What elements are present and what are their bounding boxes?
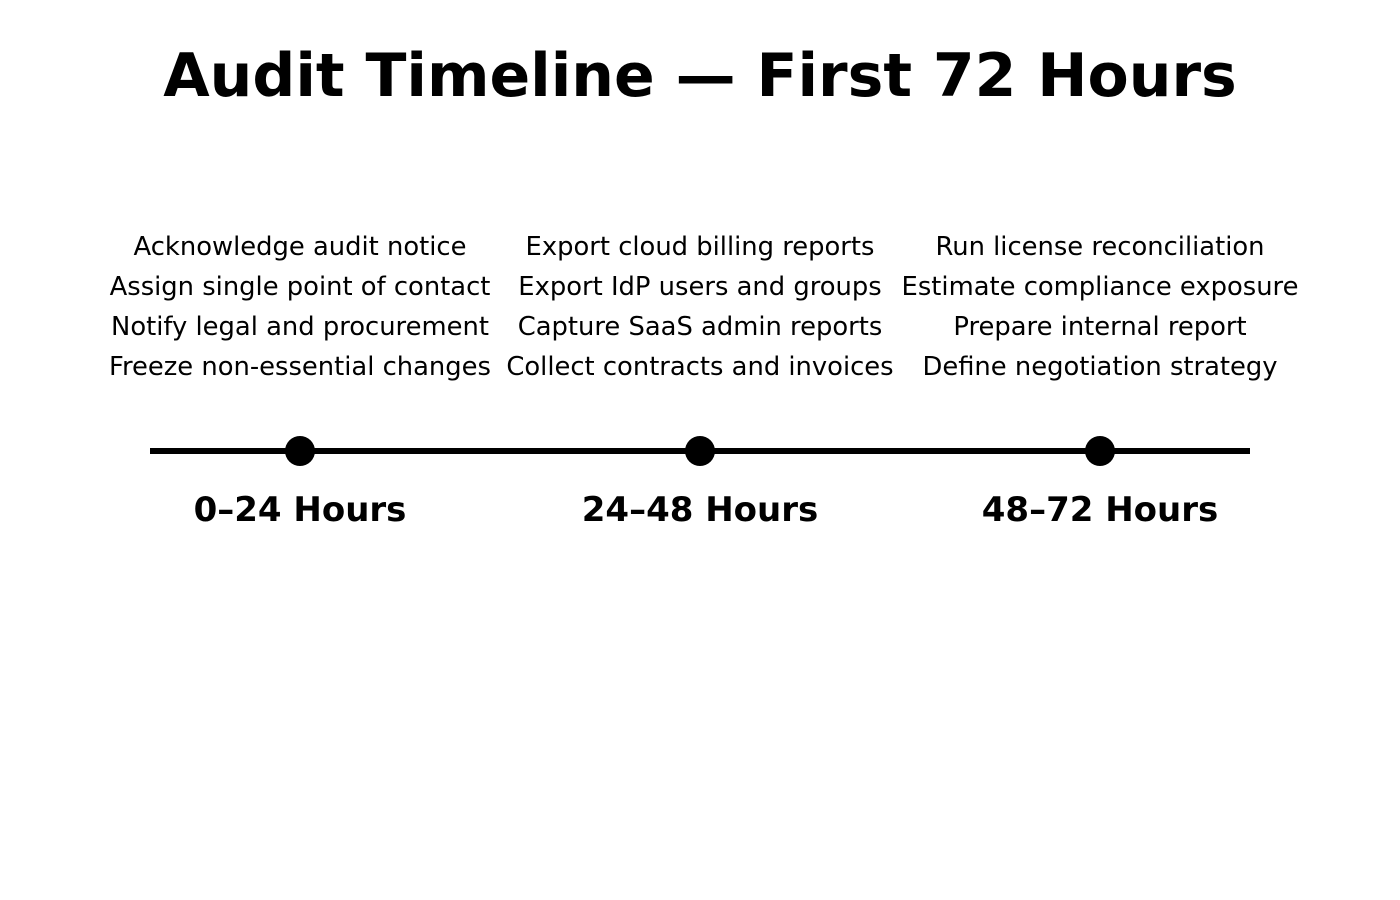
panel: 0-24 hours tasks: Freeze non-essential changes [109,352,491,382]
panel: 0-24 hours tasks [109,232,491,382]
label: 0-24 hours: 0–24 Hours [194,490,406,530]
panel: 24-48 hours tasks: Collect contracts and invoices [506,352,894,382]
panel: 24-48 hours tasks: Export IdP users and groups [518,272,882,302]
panel: 48-72 hours tasks: Prepare internal report [953,312,1247,342]
panel: 48-72 hours tasks: Run license reconciliation [935,232,1265,262]
panel: 24-48 hours tasks: Capture SaaS admin reports [518,312,882,342]
panel: 24-48 hours tasks: Export cloud billing reports [526,232,874,262]
label: 48-72 hours: 48–72 Hours [982,490,1218,530]
panel: 48-72 hours tasks: Estimate compliance exposure [902,272,1298,302]
marker: 24-48 hours [685,436,715,466]
label: 24-48 hours: 24–48 Hours [582,490,818,530]
panel: 0-24 hours tasks: Notify legal and procurement [111,312,489,342]
panel: 0-24 hours tasks: Assign single point of contact [110,272,490,302]
marker: 48-72 hours [1085,436,1115,466]
panel: 0-24 hours tasks: Acknowledge audit notice [134,232,466,262]
marker: 0-24 hours [285,436,315,466]
title: Audit Timeline — First 72 Hours [163,41,1237,111]
panel: 24-48 hours tasks [506,232,894,382]
panel: 48-72 hours tasks: Define negotiation strategy [922,352,1278,382]
panel: 48-72 hours tasks [902,232,1298,382]
timeline axis [150,448,1250,454]
